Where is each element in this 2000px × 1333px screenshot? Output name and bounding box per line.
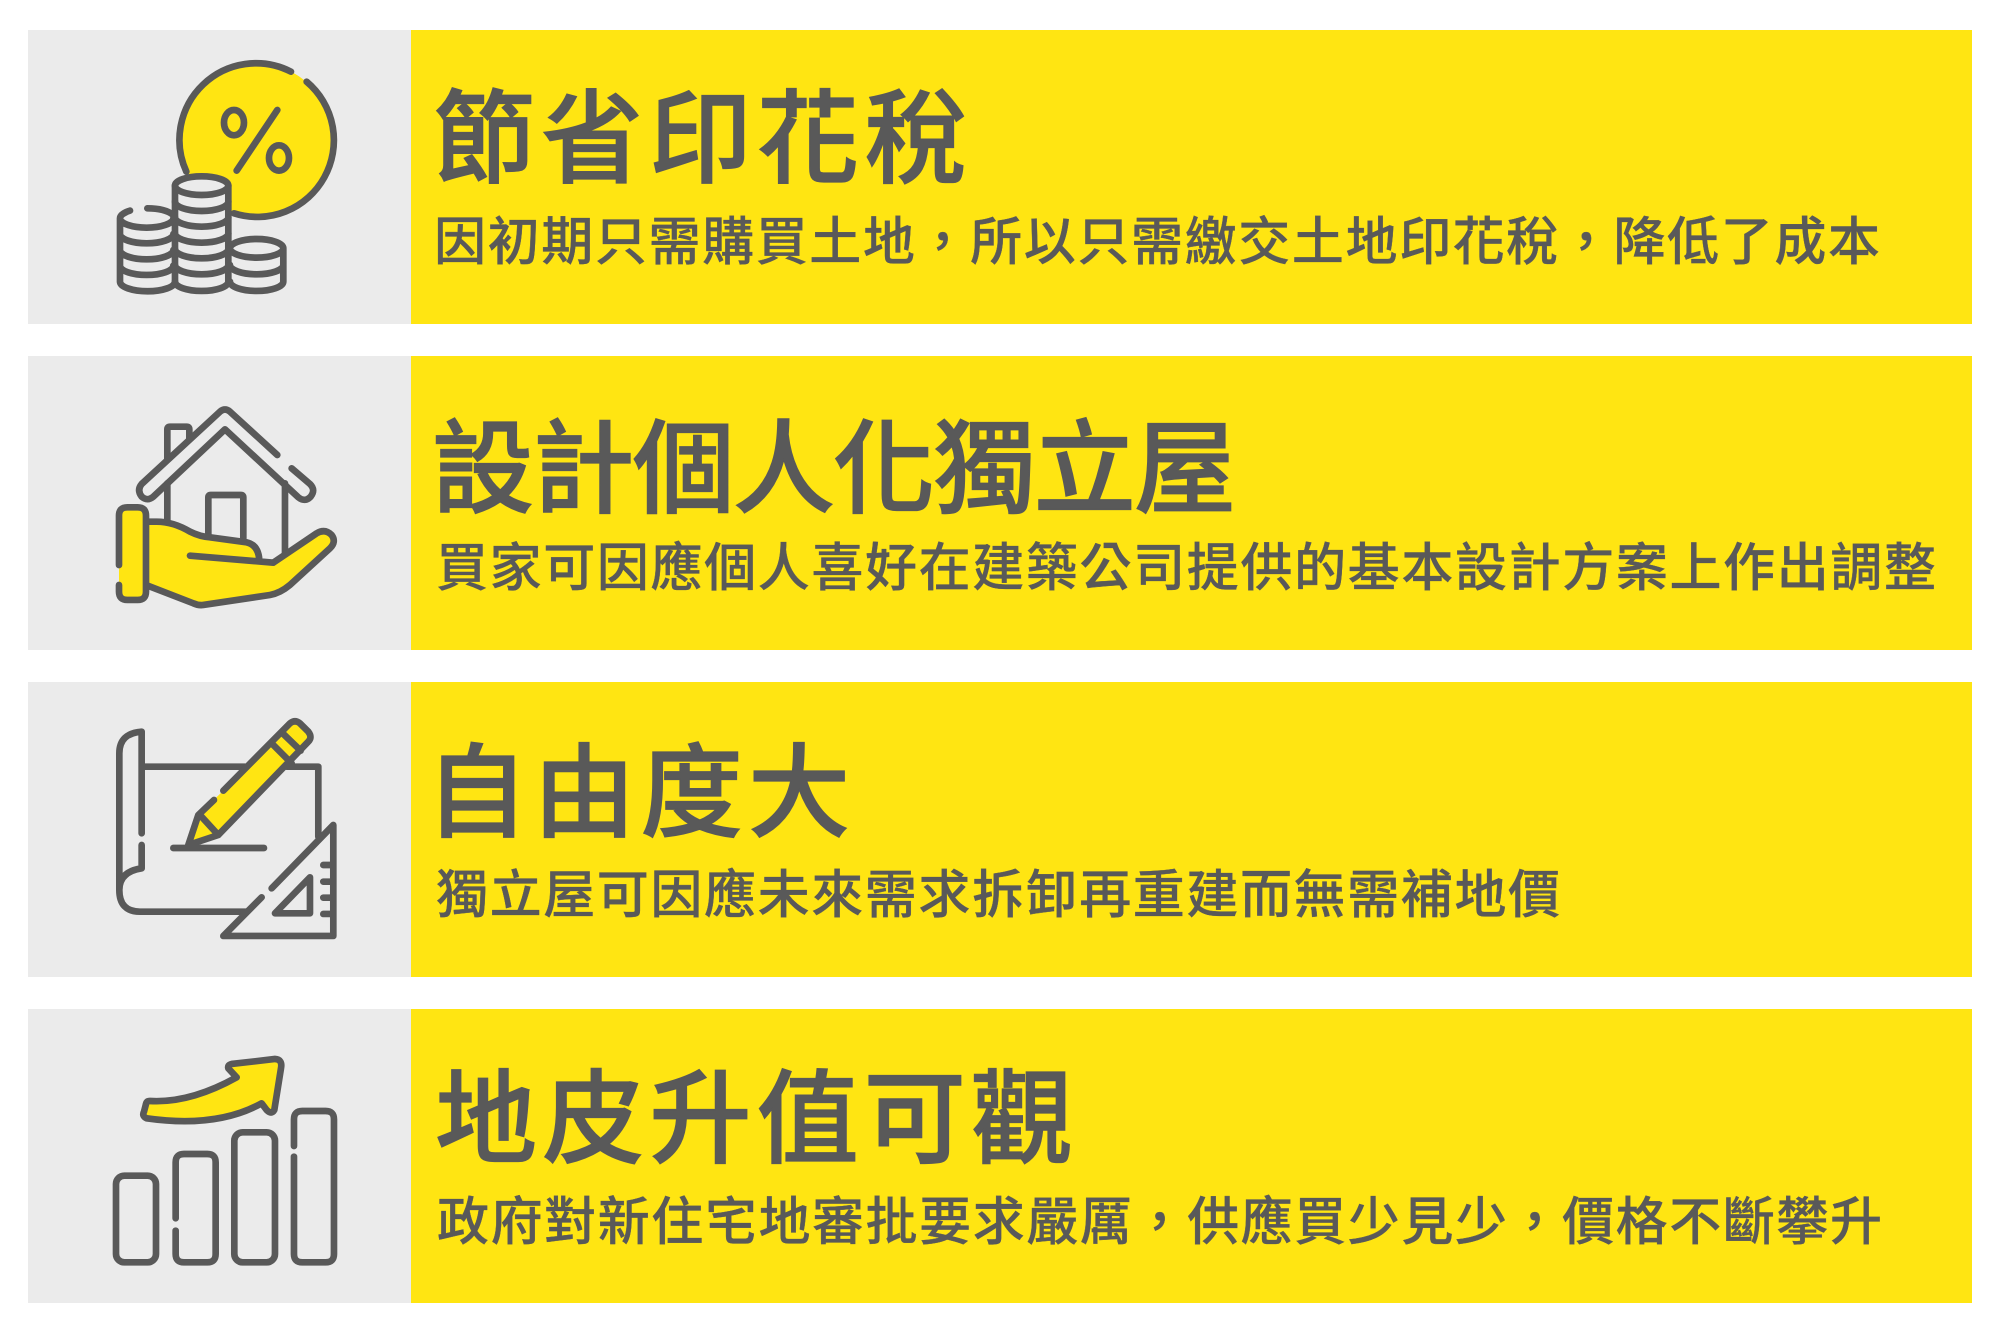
icon: house on hand xyxy=(119,409,334,605)
icon: rising bars and arrow xyxy=(116,1059,334,1262)
text panel background xyxy=(411,682,1972,977)
icon: blueprint, pencil and set square xyxy=(119,721,333,936)
panel: stamp duty xyxy=(28,30,1972,324)
description: 因初期只需購買土地，所以只需繳交土地印花稅，降低了成本 xyxy=(434,214,1880,272)
text panel background xyxy=(411,1009,1972,1303)
heading: 設計個人化獨立屋 xyxy=(432,413,1236,527)
icon panel background xyxy=(28,682,411,977)
heading: 地皮升值可觀 xyxy=(435,1063,1073,1177)
panel: land appreciation xyxy=(28,1009,1972,1303)
description: 買家可因應個人喜好在建築公司提供的基本設計方案上作出調整 xyxy=(436,540,1936,598)
panel: custom house xyxy=(28,356,1972,650)
icon panel background xyxy=(28,30,411,324)
heading: 自由度大 xyxy=(426,737,850,851)
panel: freedom xyxy=(28,682,1972,977)
icon panel background xyxy=(28,356,411,650)
description: 獨立屋可因應未來需求拆卸再重建而無需補地價 xyxy=(436,867,1560,925)
icon panel background xyxy=(28,1009,411,1303)
heading: 節省印花稅 xyxy=(433,83,967,197)
description: 政府對新住宅地審批要求嚴厲，供應買少見少，價格不斷攀升 xyxy=(437,1194,1882,1252)
text panel background xyxy=(411,30,1972,324)
text panel background xyxy=(411,356,1972,650)
icon: coins and percent xyxy=(120,63,334,291)
